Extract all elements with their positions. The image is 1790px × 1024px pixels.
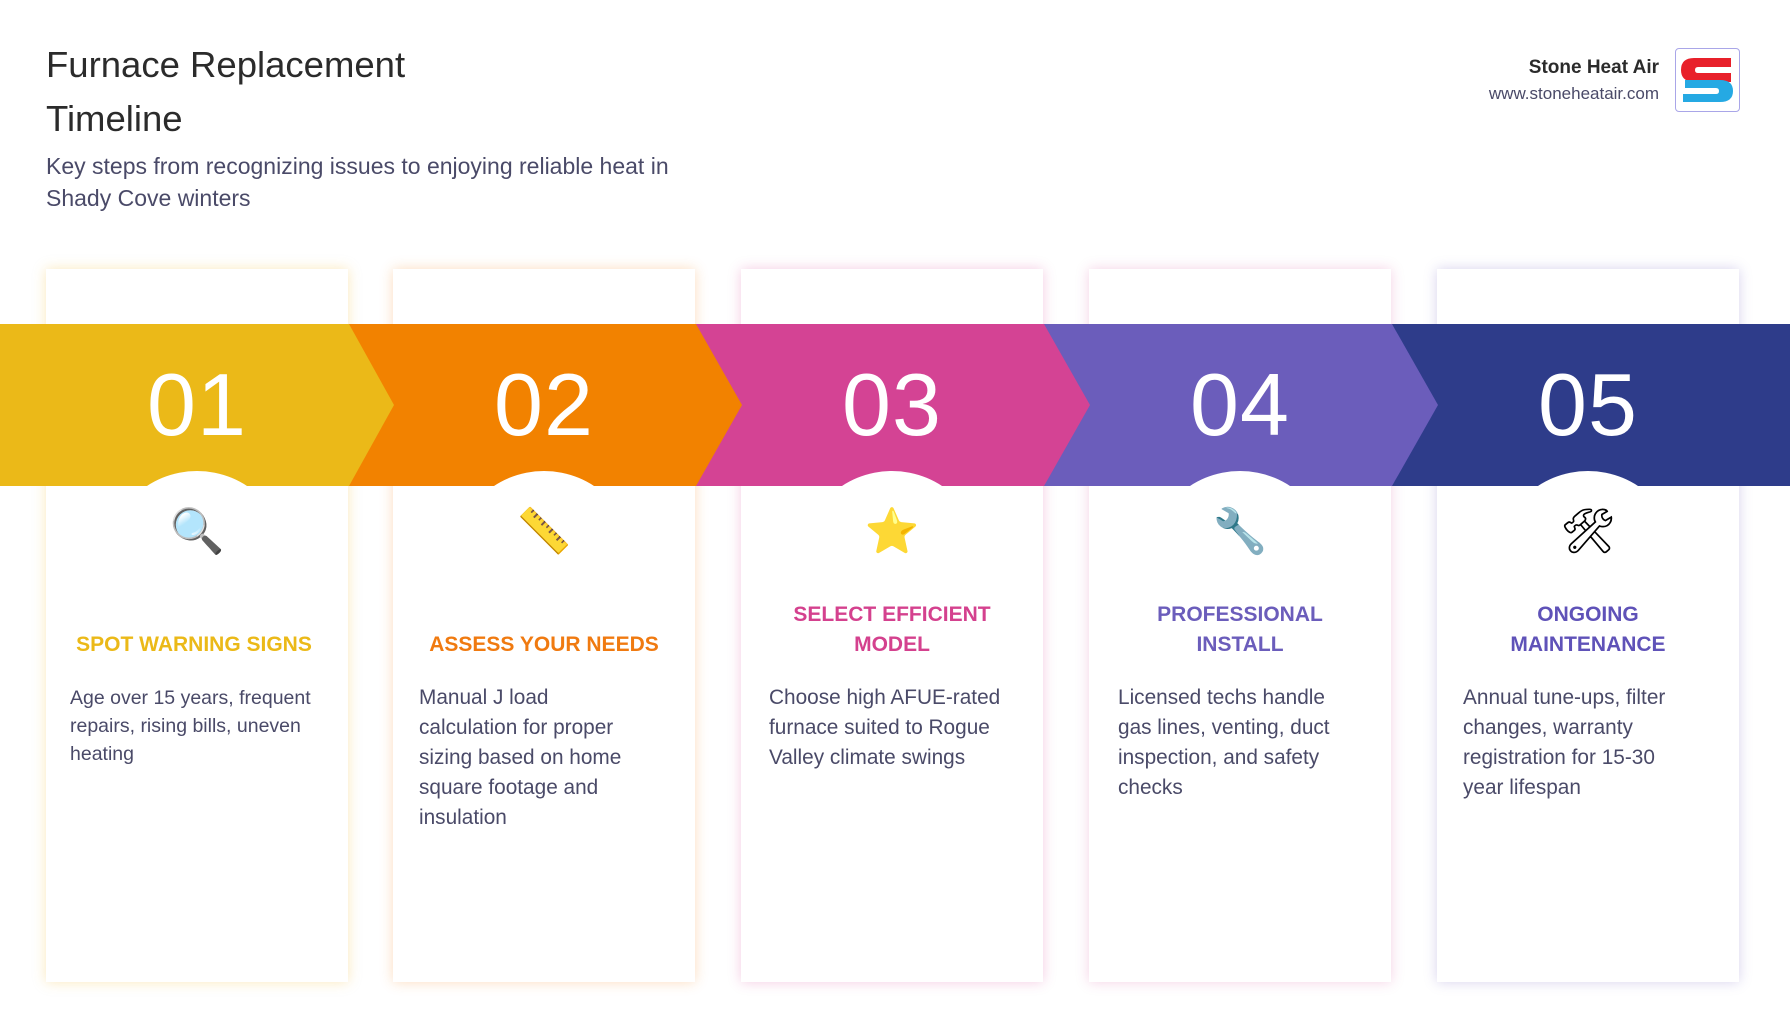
step 2 desc: calculation for proper sizing based on home square footage and insulation xyxy=(419,716,621,829)
text: 05 xyxy=(1538,355,1638,454)
icon: tools: 🛠 xyxy=(1560,506,1616,557)
title xyxy=(46,44,405,139)
step 5 desc: changes, warranty xyxy=(1463,716,1633,739)
subtitle xyxy=(46,153,669,211)
title: Timeline xyxy=(46,98,183,139)
brand text xyxy=(1488,57,1659,103)
logo xyxy=(1675,48,1740,112)
text: 02 xyxy=(494,355,594,454)
text: 03 xyxy=(842,355,942,454)
subtitle: Shady Cove winters xyxy=(46,185,251,211)
step 2 desc: Manual J load xyxy=(419,686,548,709)
step 5 desc xyxy=(1463,686,1665,799)
chevron band xyxy=(0,324,1790,486)
step 4 desc: Licensed techs handle xyxy=(1118,686,1325,709)
step 3 desc: Choose high AFUE-rated furnace suited to Rogue Valley climate swings xyxy=(769,686,1000,769)
icon: star: ⭐ xyxy=(865,506,919,557)
step 4 title: PROFESSIONAL xyxy=(1157,603,1323,626)
step 3 title: SELECT EFFICIENT xyxy=(793,603,991,626)
step 3 title: MODEL xyxy=(854,633,930,656)
icon: ruler: 📏 xyxy=(517,506,571,557)
step 5 desc: Annual tune-ups, filter xyxy=(1463,686,1665,709)
subtitle: Key steps from recognizing issues to enjoying reliable heat in xyxy=(46,153,669,179)
step 2 title: ASSESS YOUR NEEDS xyxy=(429,633,659,656)
title: Furnace Replacement xyxy=(46,44,405,85)
step 1 title: SPOT WARNING SIGNS xyxy=(76,633,312,656)
step 4 title: INSTALL xyxy=(1196,633,1284,656)
step 5 title xyxy=(1510,603,1666,656)
step 5 desc: registration for 15-30 xyxy=(1463,746,1655,769)
brand text: Stone Heat Air xyxy=(1529,57,1659,78)
step 4 desc: gas lines, venting, duct inspection, and safety checks xyxy=(1118,716,1330,799)
icon: magnifier: 🔍 xyxy=(170,506,224,557)
cards xyxy=(46,269,348,982)
numbers: 01 xyxy=(147,355,247,454)
brand text: www.stoneheatair.com xyxy=(1489,84,1659,103)
step 5 desc: year lifespan xyxy=(1463,776,1581,799)
step 1 desc: Age over 15 years, frequent repairs, rising bills, uneven heating xyxy=(70,687,311,765)
text: 04 xyxy=(1190,355,1290,454)
step 4 title xyxy=(1157,603,1323,656)
step 5 title: MAINTENANCE xyxy=(1510,633,1666,656)
circle tabs xyxy=(106,471,288,653)
step 3 title xyxy=(793,603,991,656)
step 5 title: ONGOING xyxy=(1537,603,1639,626)
icon: wrench: 🔧 xyxy=(1213,506,1267,557)
